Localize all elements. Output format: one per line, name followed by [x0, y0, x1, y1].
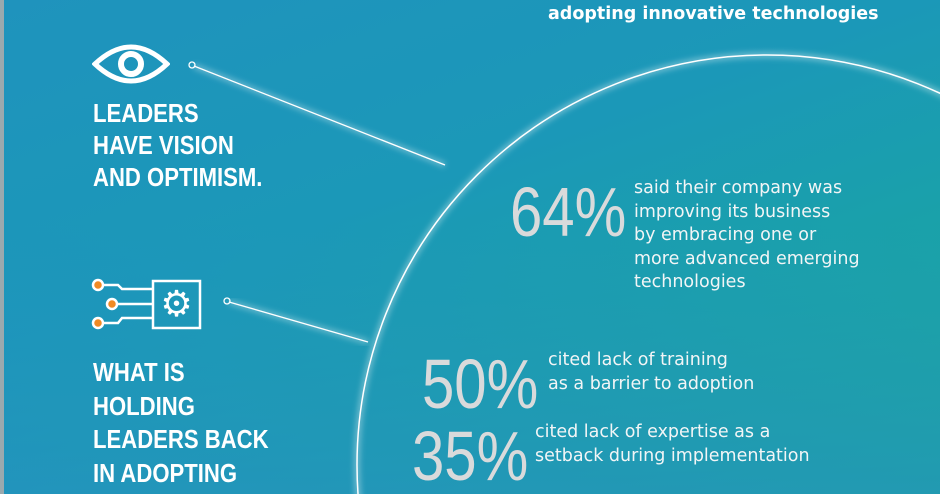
heading: what is holding leaders back: HOLDING	[93, 390, 195, 420]
heading: leaders have vision: LEADERS	[93, 98, 199, 128]
stat: 35%: cited lack of expertise as a	[535, 422, 770, 442]
icon: circuit gear	[92, 278, 202, 330]
stat: 50%	[422, 345, 754, 423]
heading: leaders have vision	[93, 98, 262, 192]
stat: 64%: 64%	[510, 173, 626, 251]
stat: 64%: by embracing one or	[634, 225, 816, 245]
heading: leaders have vision: AND OPTIMISM.	[93, 162, 262, 192]
stat: 64%: said their company was	[634, 178, 842, 198]
headline: adopting innovative technologies	[548, 4, 879, 24]
stat: 50%: cited lack of training	[548, 350, 728, 370]
icon: eye	[92, 44, 170, 84]
stat: 50%: as a barrier to adoption	[548, 374, 754, 394]
icon: circuit gear: ⚙	[160, 284, 193, 325]
heading: what is holding leaders back: LEADERS BACK	[93, 424, 269, 454]
stat: 64%: improving its business	[634, 202, 830, 222]
stat: 50%: 50%	[422, 345, 538, 423]
stat: 64%	[510, 173, 860, 292]
heading: what is holding leaders back	[93, 357, 269, 488]
heading: what is holding leaders back: IN ADOPTING	[93, 458, 237, 488]
stat: 35%: setback during implementation	[535, 446, 810, 466]
stat: 35%: 35%	[412, 417, 528, 494]
heading: what is holding leaders back: WHAT IS	[93, 357, 185, 387]
stat: 35%	[412, 417, 810, 494]
heading: leaders have vision: HAVE VISION	[93, 130, 234, 160]
stat: 64%: technologies	[634, 272, 746, 292]
stat: 64%: more advanced emerging	[634, 248, 860, 268]
